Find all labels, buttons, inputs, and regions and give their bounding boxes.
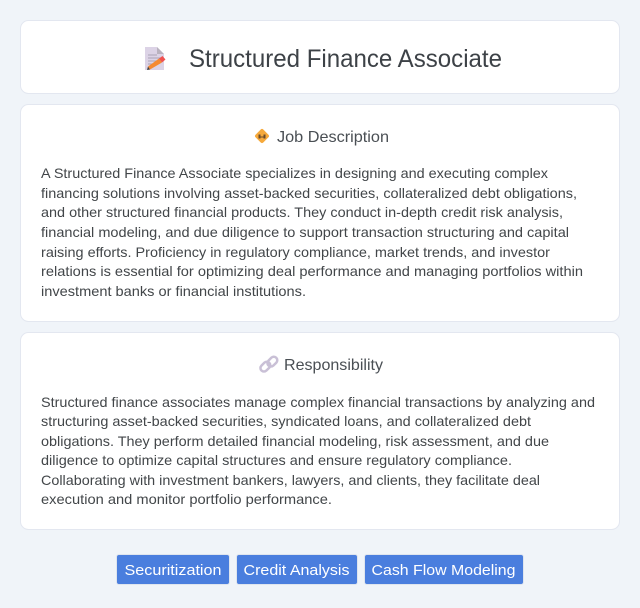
job description text: relations is essential for optimizing deal performance and managing portfolios within xyxy=(41,263,583,279)
panel: responsibility xyxy=(20,332,620,530)
job description text: financing solutions involving asset-backed securities, collateralized debt obligations, xyxy=(41,185,577,201)
responsibility text: Structured finance associates manage complex financial transactions by analyzing and xyxy=(41,394,595,410)
job description text: raising efforts. Proficiency in regulatory compliance, market trends, and investor xyxy=(41,244,550,260)
tag: credit analysis: Credit Analysis xyxy=(244,562,350,579)
icon: chain link xyxy=(259,355,279,373)
title text: Structured Finance Associate xyxy=(189,45,502,73)
icon: orange diamond xyxy=(254,128,270,144)
responsibility text: obligations. They perform detailed financial modeling, risk assessment, and due xyxy=(41,433,549,449)
job description text xyxy=(41,165,583,299)
responsibility text: Collaborating with investment bankers, lawyers, and clients, they facilitate deal xyxy=(41,472,540,488)
heading: job description: Job Description xyxy=(277,129,389,146)
job description text: financial modeling, and due diligence to support transaction structuring and capital xyxy=(41,224,569,240)
panel: job description xyxy=(20,104,620,322)
icon: document with pencil xyxy=(145,47,166,70)
tag: securitization xyxy=(116,554,230,584)
heading: responsibility: Responsibility xyxy=(284,357,383,374)
tag: cash flow modeling xyxy=(364,554,524,584)
job description text: and other structured financial products. They conduct in-depth credit risk analysis, xyxy=(41,204,563,220)
panel: title xyxy=(20,20,620,94)
tag: cash flow modeling: Cash Flow Modeling xyxy=(372,562,516,579)
responsibility text: diligence to optimize capital structures and ensure regulatory compliance. xyxy=(41,452,512,468)
job description text: A Structured Finance Associate specializes in designing and executing complex xyxy=(41,165,548,181)
responsibility text: structuring asset-backed securities, syndicated loans, and collateralized debt xyxy=(41,413,531,429)
tag: securitization: Securitization xyxy=(124,562,222,579)
job description text: investment banks or financial institutions. xyxy=(41,283,306,299)
tag: credit analysis xyxy=(236,554,358,584)
responsibility text xyxy=(41,394,595,507)
responsibility text: execution and monitor portfolio performance. xyxy=(41,491,332,507)
